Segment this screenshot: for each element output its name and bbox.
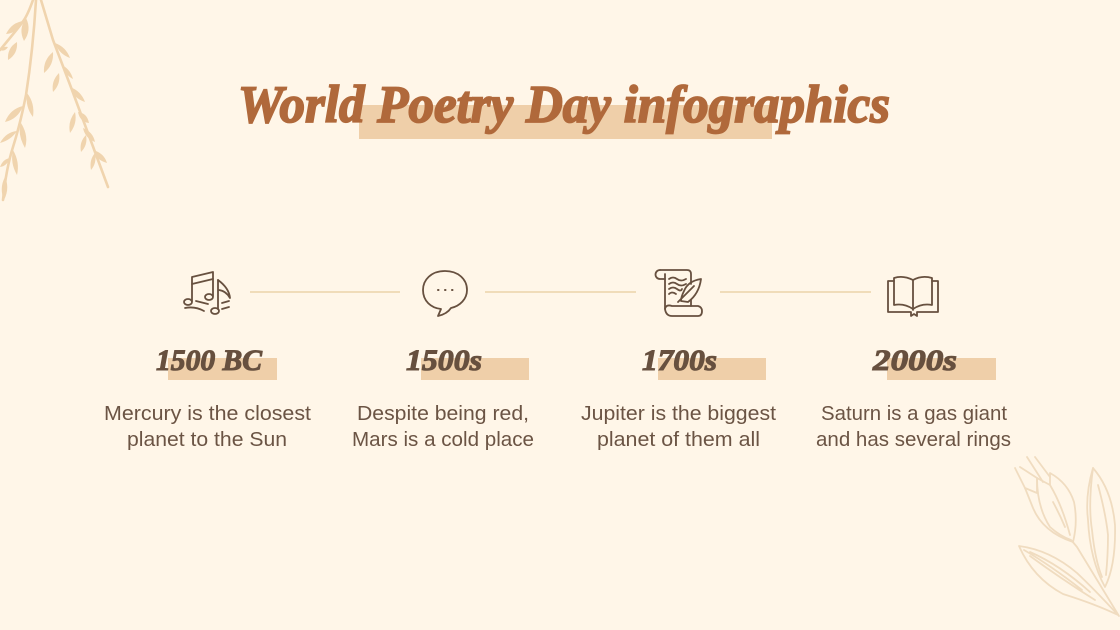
year 3: 1700s [642, 344, 717, 377]
icon: scroll and quill [656, 270, 702, 316]
description 3: planet of them all [597, 428, 760, 451]
year highlight 2 [421, 358, 529, 380]
year highlight 3 [658, 358, 766, 380]
description 4: and has several rings [816, 428, 1011, 451]
year highlight 4 [887, 358, 996, 380]
description 2 [352, 402, 534, 451]
title highlight [359, 105, 772, 139]
column 1 [104, 344, 311, 451]
icon: music notes [184, 272, 230, 314]
year 4: 2000s [872, 344, 957, 377]
column 2 [352, 344, 534, 451]
connector lines [250, 291, 871, 293]
description 1: Mercury is the closest [104, 402, 311, 425]
icon: speech bubble [423, 271, 467, 316]
year 1: 1500 BC [156, 344, 263, 377]
description 3 [581, 402, 776, 451]
description 1: planet to the Sun [127, 428, 287, 451]
decoration: hanging leaves, top left [0, 0, 108, 200]
year 2: 1500s [406, 344, 482, 377]
year highlight 1 [168, 358, 277, 380]
description 3: Jupiter is the biggest [581, 402, 776, 425]
title: World Poetry Day infographics [238, 76, 890, 134]
description 1 [104, 402, 311, 451]
icon: open book [888, 277, 938, 316]
column 4 [816, 344, 1011, 451]
column 3 [581, 344, 776, 451]
description 2: Despite being red, [357, 402, 529, 425]
description 4: Saturn is a gas giant [821, 402, 1007, 425]
description 4 [816, 402, 1011, 451]
description 2: Mars is a cold place [352, 428, 534, 451]
decoration: flower, bottom right [1015, 457, 1119, 616]
